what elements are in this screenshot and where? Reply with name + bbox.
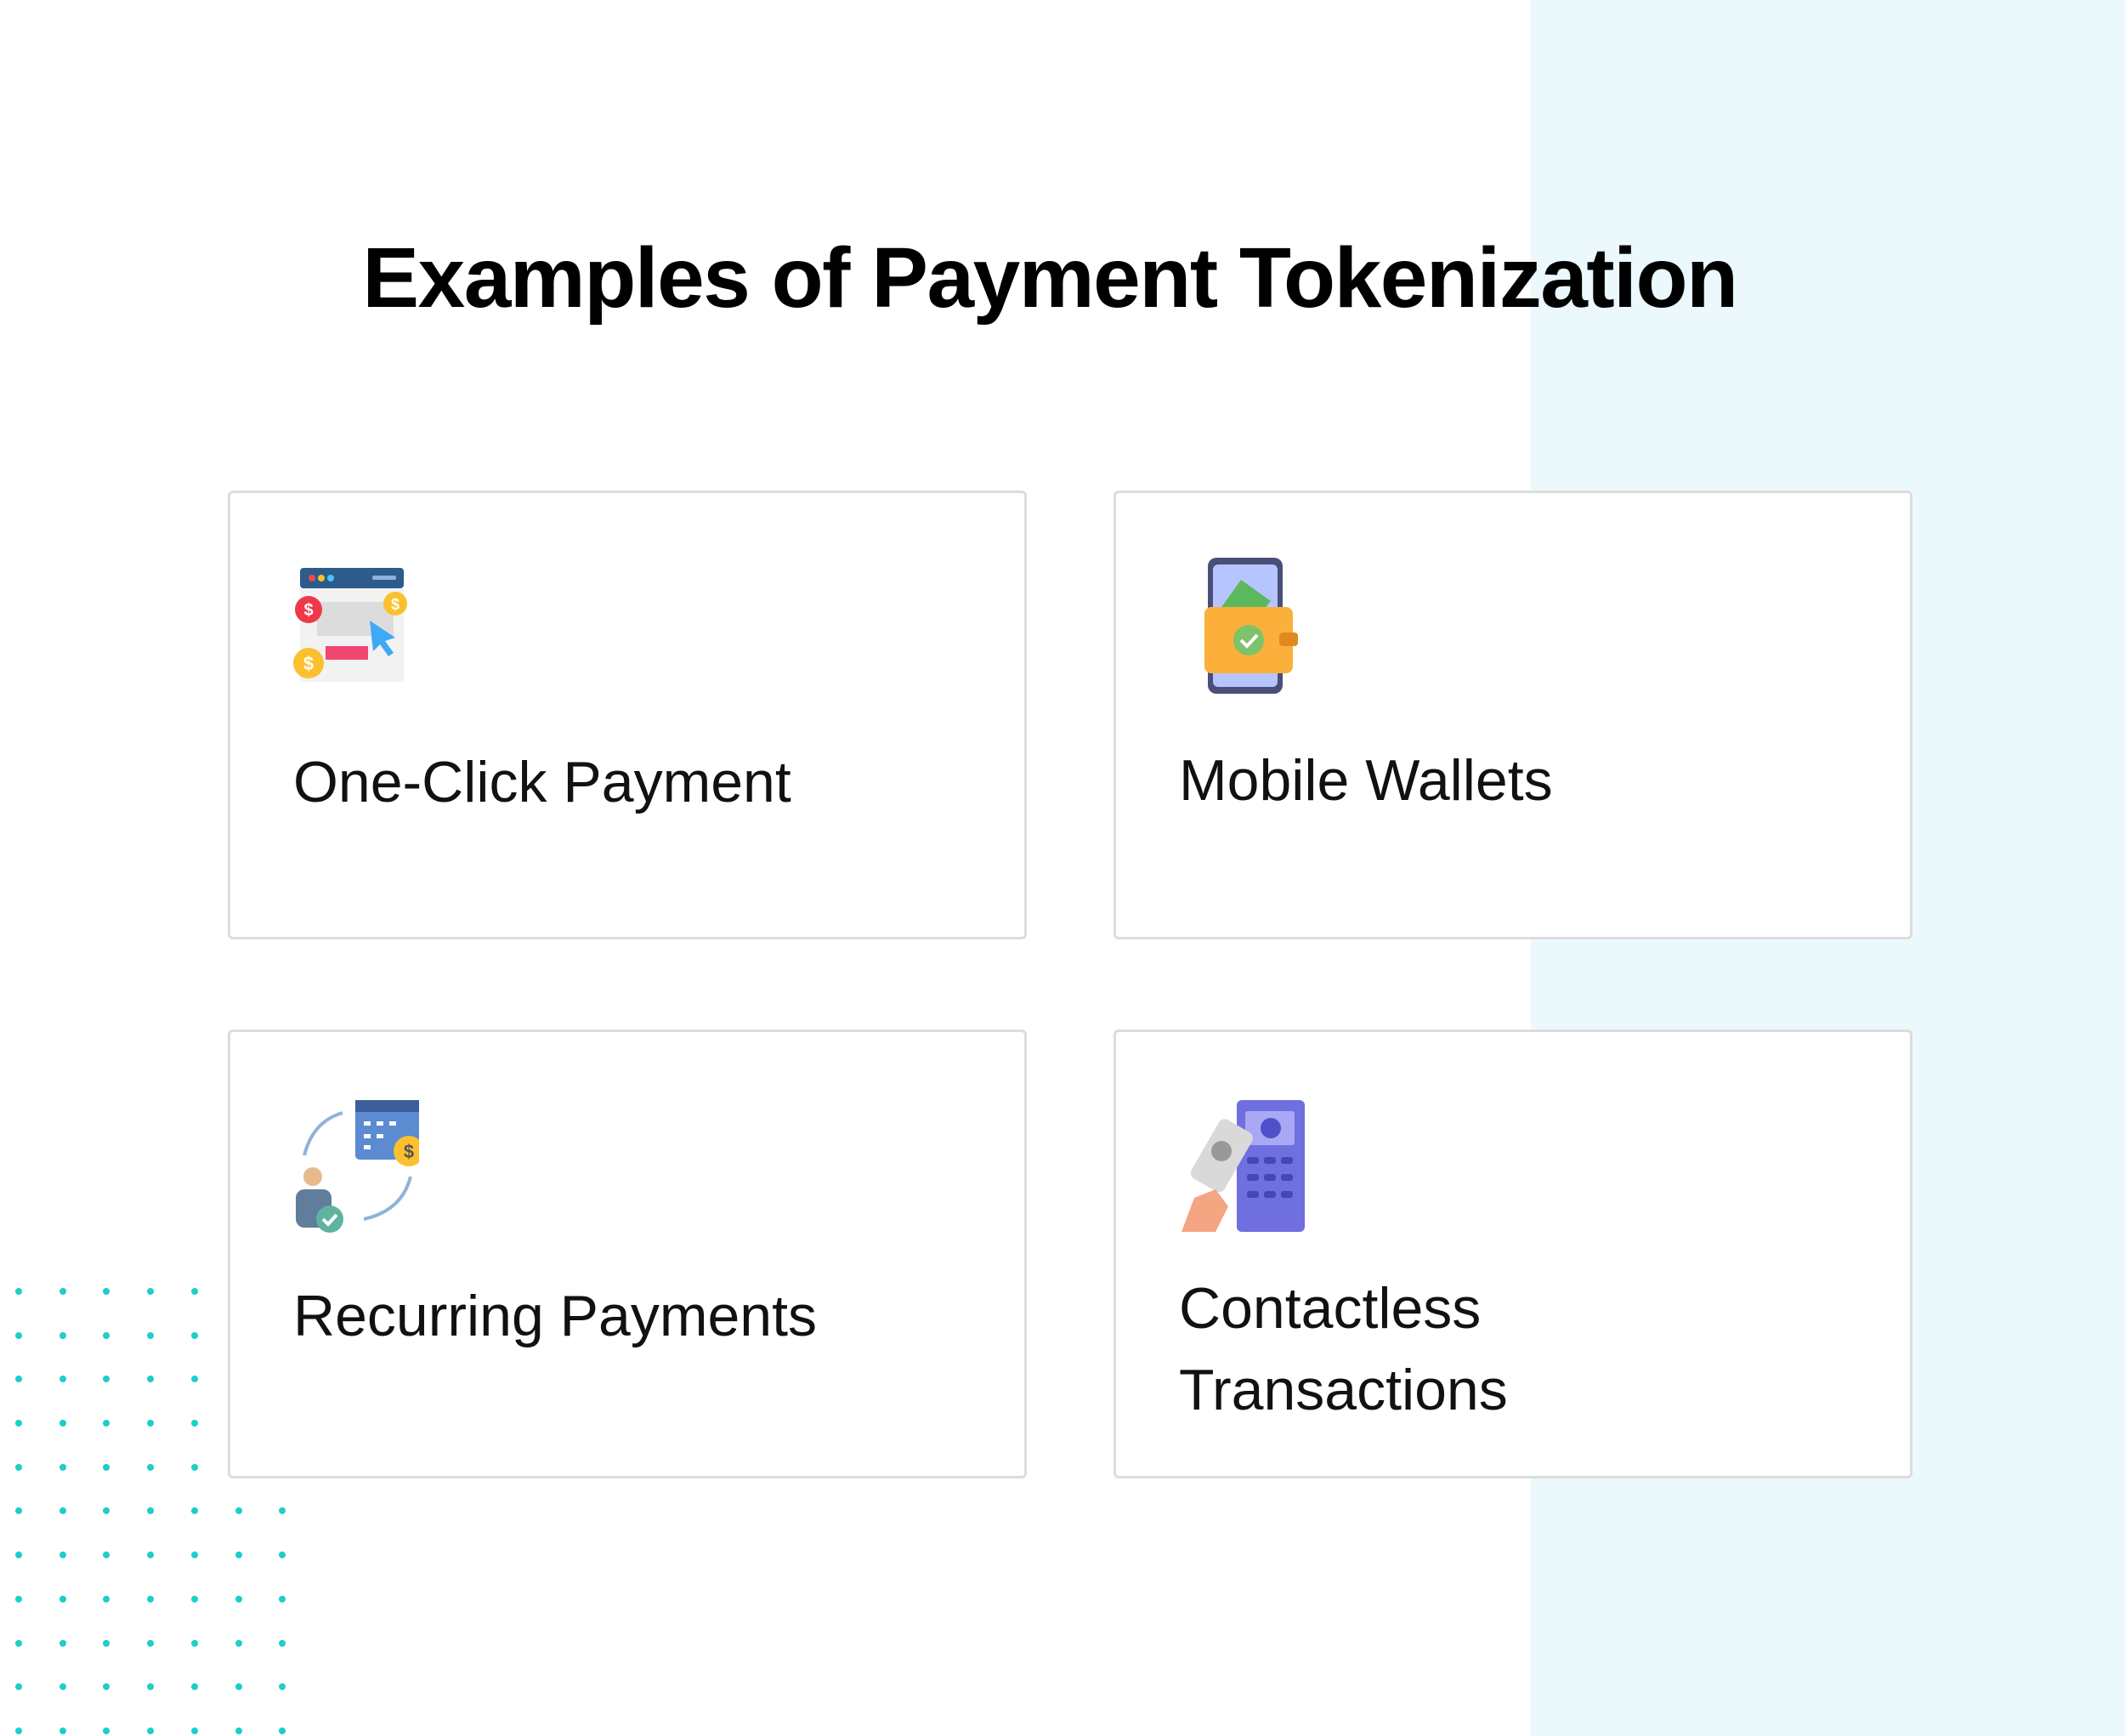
icon: phone wallet bbox=[1204, 558, 1298, 694]
label: Transactions bbox=[1179, 1358, 1508, 1422]
label: Recurring Payments bbox=[293, 1284, 817, 1348]
icon: contactless terminal bbox=[1182, 1100, 1305, 1232]
background light blue panel bbox=[1531, 0, 2125, 1736]
label: Mobile Wallets bbox=[1179, 748, 1553, 813]
label: Contactless bbox=[1179, 1276, 1481, 1341]
icon: browser with click: $ bbox=[391, 596, 400, 613]
decorative dots pattern bbox=[15, 1288, 286, 1734]
panel: one-click payment bbox=[228, 491, 1027, 939]
panel: recurring payments bbox=[228, 1030, 1027, 1478]
title: Examples of Payment Tokenization bbox=[362, 230, 1737, 326]
icon: browser with click: $ bbox=[303, 601, 314, 620]
panel: contactless transactions bbox=[1114, 1030, 1912, 1478]
icon: browser with click: $ bbox=[303, 653, 314, 674]
panel: mobile wallets bbox=[1114, 491, 1912, 939]
label bbox=[1179, 1276, 1508, 1422]
icon: recurring calendar: $ bbox=[404, 1141, 414, 1162]
label: One-Click Payment bbox=[293, 750, 791, 814]
icon: browser with click bbox=[293, 568, 407, 682]
icon: recurring calendar bbox=[296, 1100, 419, 1233]
